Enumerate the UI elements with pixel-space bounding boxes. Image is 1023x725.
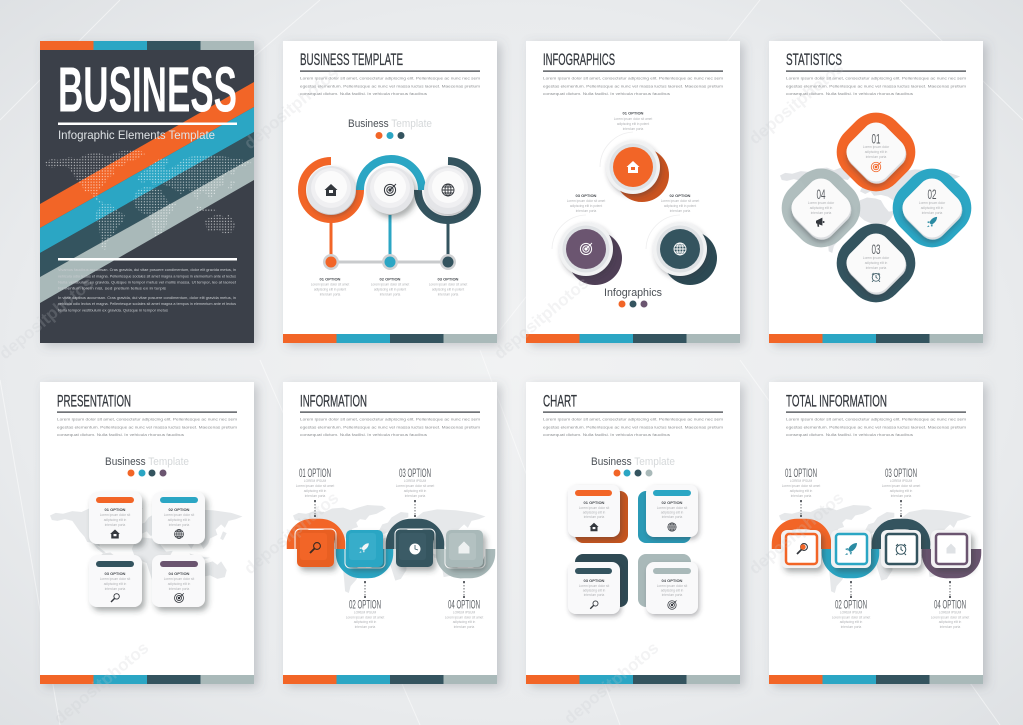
panel: presentation bbox=[40, 382, 254, 684]
card 01 bbox=[568, 485, 628, 543]
connector 04 bbox=[463, 581, 465, 598]
card 01 bbox=[89, 492, 142, 544]
diamond 02: interdum porta bbox=[922, 211, 942, 215]
diamond 04: 04 bbox=[816, 187, 826, 202]
card 02: Lorem ipsum dolor sit bbox=[657, 506, 687, 510]
card 04: Lorem ipsum dolor sit bbox=[164, 577, 194, 581]
diamond 03: Lorem ipsum dolor bbox=[863, 256, 890, 260]
ribbon highlight outlines bbox=[295, 529, 485, 568]
footer bar bbox=[769, 675, 983, 684]
label 02: adipiscing elit in bbox=[354, 620, 376, 624]
label 04: Lorem ipsum dolor sit amet bbox=[931, 616, 969, 620]
label 03: Lorem ipsum dolor sit amet bbox=[429, 282, 467, 286]
node 3 dark bbox=[418, 161, 477, 270]
diamond 01: Lorem ipsum dolor bbox=[863, 145, 890, 149]
heading rule bbox=[543, 70, 723, 72]
body text bbox=[786, 76, 967, 96]
body text: egestas elementum. Pellentesque ac nunc vel massa luctus laoreet. Maecenas pretium bbox=[786, 84, 967, 88]
card 02: Lorem ipsum dolor sit bbox=[164, 513, 194, 517]
legend dots bbox=[128, 470, 166, 476]
label 01: LOREM IPSUM bbox=[790, 479, 812, 483]
label 02: interdum porta bbox=[355, 625, 375, 629]
card 03: Lorem ipsum dolor sit bbox=[100, 577, 130, 581]
footer bar bbox=[283, 334, 497, 343]
connector 03 bbox=[414, 500, 416, 517]
card 03: interdum porta bbox=[584, 593, 604, 597]
stock watermarks: depositphotos bbox=[240, 63, 342, 153]
cover body text: Vivamus faucibus accumsan. Cras gravida, dui vitae posuere condimentum, dolor elit gravida metus, in bbox=[58, 268, 236, 272]
footer bar bbox=[526, 675, 740, 684]
body text: Lorem ipsum dolor sit amet, consectetur adipiscing elit. Pellentesque ac nunc nec sem bbox=[786, 416, 967, 422]
label 03: adipiscing elit in potent bbox=[432, 288, 464, 292]
label 01 bbox=[311, 276, 349, 296]
legend dots bbox=[614, 470, 652, 476]
heading: BUSINESS TEMPLATE bbox=[300, 50, 403, 69]
footer bar bbox=[283, 675, 497, 684]
body text bbox=[543, 76, 724, 96]
label 01: adipiscing elit in potent bbox=[617, 122, 649, 126]
heading rule bbox=[300, 70, 480, 72]
label 02: adipiscing elit in potent bbox=[374, 288, 406, 292]
label 02: 02 OPTION bbox=[380, 276, 401, 282]
card 02 bbox=[152, 492, 205, 544]
body text: consequat dictum. Nulla facilisi. In vehicula rhoncus faucibus bbox=[786, 91, 913, 96]
card 02 bbox=[638, 485, 698, 543]
heading: CHART bbox=[543, 392, 577, 410]
body text: consequat dictum. Nulla facilisi. In vehicula rhoncus faucibus bbox=[543, 432, 670, 437]
world map bbox=[293, 505, 486, 593]
card 01: 01 OPTION bbox=[584, 500, 605, 505]
label 03: LOREM IPSUM bbox=[404, 479, 426, 483]
teal disc with globe icon bbox=[646, 215, 717, 285]
cover title: BUSINESS bbox=[58, 54, 237, 126]
label 04: Lorem ipsum dolor sit amet bbox=[445, 616, 483, 620]
label 03: interdum porta bbox=[576, 209, 596, 213]
label 02: LOREM IPSUM bbox=[840, 610, 862, 614]
connector 03 bbox=[900, 500, 902, 517]
card 01: Lorem ipsum dolor sit bbox=[579, 506, 609, 510]
node 1 orange bbox=[302, 161, 360, 270]
legend dots bbox=[376, 132, 404, 139]
panel: total information bbox=[769, 382, 983, 684]
stock watermarks bbox=[0, 58, 847, 725]
card 03: 03 OPTION bbox=[584, 578, 605, 583]
body text: egestas elementum. Pellentesque ac nunc vel massa luctus laoreet. Maecenas pretium bbox=[300, 84, 481, 88]
card 01: interdum porta bbox=[105, 523, 125, 527]
body text: consequat dictum. Nulla facilisi. In vehicula rhoncus faucibus bbox=[543, 91, 670, 96]
card 03 bbox=[568, 554, 628, 614]
label 02 bbox=[661, 193, 699, 213]
label 03 bbox=[882, 468, 920, 498]
cover body text: vehicula odio lectus et magna. Pellentesque sodales sit amet magna a tempus in elementum ante et lectus bbox=[58, 302, 236, 306]
card 01: Lorem ipsum dolor sit bbox=[100, 513, 130, 517]
label 04: adipiscing elit in bbox=[939, 620, 961, 624]
body text: egestas elementum. Pellentesque ac nunc vel massa luctus laoreet. Maecenas pretium bbox=[543, 424, 724, 430]
heading rule bbox=[300, 412, 480, 413]
cover body text: Nulla vestibulum ex gravida. Quisque in tempor metus vel mollis massa. Ut tempor, leo at laoreet bbox=[58, 280, 236, 284]
body text bbox=[300, 416, 481, 437]
label 03 bbox=[429, 276, 467, 296]
stock watermarks: depositphotos bbox=[745, 488, 847, 578]
panel: statistics bbox=[769, 41, 983, 343]
label 02: interdum porta bbox=[670, 209, 690, 213]
label 02: adipiscing elit in potent bbox=[664, 204, 696, 208]
label 01: interdum porta bbox=[791, 494, 811, 498]
diamond 02: Lorem ipsum dolor bbox=[919, 201, 946, 205]
world map bbox=[780, 165, 960, 253]
label 01 bbox=[614, 110, 652, 131]
connector 01 bbox=[800, 500, 802, 517]
card 04: 04 OPTION bbox=[169, 571, 190, 576]
diamond 04: adipiscing elit in bbox=[810, 206, 832, 210]
legend dots bbox=[618, 300, 648, 308]
diamond 01 bbox=[825, 101, 927, 203]
label 02: Lorem ipsum dolor sit amet bbox=[661, 199, 699, 203]
label 03: 03 OPTION bbox=[885, 468, 917, 480]
card 04: adipiscing elit in bbox=[661, 588, 683, 592]
label 04: LOREM IPSUM bbox=[939, 610, 961, 614]
label 02 bbox=[346, 600, 384, 629]
label 01: 01 OPTION bbox=[320, 276, 341, 282]
body text: egestas elementum. Pellentesque ac nunc vel massa luctus laoreet. Maecenas pretium bbox=[57, 424, 238, 430]
diamond 01: 01 bbox=[872, 132, 880, 146]
label 01: interdum porta bbox=[305, 494, 325, 498]
card 03: Lorem ipsum dolor sit bbox=[579, 584, 609, 588]
label 01: Lorem ipsum dolor sit amet bbox=[782, 484, 820, 488]
label 01: adipiscing elit in bbox=[790, 489, 812, 493]
ribbon bbox=[292, 524, 490, 573]
panel: information bbox=[283, 382, 497, 684]
square 4 with document bbox=[446, 530, 483, 567]
label 02 bbox=[832, 600, 870, 629]
stock watermarks: depositphotos bbox=[240, 488, 342, 578]
square 2 with rocket bbox=[346, 530, 383, 567]
heading: TOTAL INFORMATION bbox=[786, 392, 887, 410]
diamond 02: adipiscing elit in bbox=[921, 206, 943, 210]
label 01: Lorem ipsum dolor sit amet bbox=[614, 117, 652, 121]
heading: PRESENTATION bbox=[57, 392, 131, 410]
label 04: LOREM IPSUM bbox=[453, 610, 475, 614]
orange disc with home icon bbox=[600, 132, 669, 202]
connector 02 bbox=[364, 581, 366, 598]
purple disc with target icon bbox=[552, 215, 622, 285]
diamond 01: adipiscing elit in bbox=[865, 150, 887, 154]
card 04: adipiscing elit in bbox=[168, 582, 190, 586]
square 1 with magnifier bbox=[781, 530, 821, 568]
card 04: Lorem ipsum dolor sit bbox=[657, 584, 687, 588]
connector 01 bbox=[314, 500, 316, 517]
label 02: interdum porta bbox=[841, 625, 861, 629]
chart heading: Business Template bbox=[591, 456, 675, 468]
dotted world map bbox=[45, 150, 252, 250]
disc with globe icon bbox=[424, 166, 472, 214]
connector line bbox=[331, 260, 448, 264]
heading: INFOGRAPHICS bbox=[543, 50, 615, 69]
square 2 with rocket bbox=[831, 530, 871, 568]
label 01: Lorem ipsum dolor sit amet bbox=[311, 282, 349, 286]
label 04: 04 OPTION bbox=[448, 600, 480, 612]
panel: chart bbox=[526, 382, 740, 684]
card 04: interdum porta bbox=[169, 587, 189, 591]
card 01: adipiscing elit in bbox=[104, 518, 126, 522]
label 02: Lorem ipsum dolor sit amet bbox=[832, 616, 870, 620]
chart heading: Business Template bbox=[348, 118, 432, 130]
ribbon bbox=[777, 524, 976, 573]
card 02: interdum porta bbox=[662, 515, 682, 519]
world map bbox=[50, 505, 243, 593]
body text bbox=[57, 416, 238, 437]
square 3 with clock bbox=[881, 530, 921, 568]
label 02: interdum porta bbox=[380, 292, 400, 296]
diamond 04: interdum porta bbox=[811, 211, 831, 215]
card 02: 02 OPTION bbox=[169, 507, 190, 512]
body text: consequat dictum. Nulla facilisi. In vehicula rhoncus faucibus bbox=[300, 91, 427, 96]
diamond 03: 03 bbox=[872, 242, 880, 257]
label 02: 02 OPTION bbox=[670, 193, 691, 198]
label 03 bbox=[396, 468, 434, 498]
panel: business template bbox=[283, 41, 497, 343]
label 04: interdum porta bbox=[940, 625, 960, 629]
label 03: Lorem ipsum dolor sit amet bbox=[882, 484, 920, 488]
square 1 with magnifier bbox=[297, 530, 334, 567]
square 4 with document bbox=[931, 530, 971, 568]
disc with target icon bbox=[366, 166, 414, 214]
diamond 04 bbox=[770, 157, 872, 259]
diamond 03: interdum porta bbox=[866, 266, 886, 270]
heading: STATISTICS bbox=[786, 50, 842, 69]
cover subtitle: Infographic Elements Template bbox=[58, 128, 215, 142]
card 03: adipiscing elit in bbox=[104, 582, 126, 586]
label 01: interdum porta bbox=[320, 292, 340, 296]
heading: INFORMATION bbox=[300, 392, 367, 410]
label 03: Lorem ipsum dolor sit amet bbox=[567, 199, 605, 203]
label 02 bbox=[371, 276, 409, 296]
footer bar bbox=[769, 334, 983, 343]
label 03: interdum porta bbox=[438, 292, 458, 296]
body text bbox=[543, 416, 724, 437]
label 02: 02 OPTION bbox=[835, 600, 867, 612]
label 03 bbox=[567, 193, 605, 213]
card 04 bbox=[152, 555, 205, 607]
label 01: 01 OPTION bbox=[623, 110, 644, 116]
card 02: interdum porta bbox=[169, 523, 189, 527]
card 04 bbox=[638, 554, 698, 614]
body text: egestas elementum. Pellentesque ac nunc vel massa luctus laoreet. Maecenas pretium bbox=[300, 424, 481, 430]
heading rule bbox=[543, 412, 723, 413]
card 04: interdum porta bbox=[662, 593, 682, 597]
label 01: 01 OPTION bbox=[299, 468, 331, 480]
label 01: LOREM IPSUM bbox=[304, 479, 326, 483]
card 01: 01 OPTION bbox=[105, 507, 126, 512]
body text: consequat dictum. Nulla facilisi. In vehicula rhoncus faucibus bbox=[57, 432, 184, 437]
card 03 bbox=[89, 555, 142, 607]
label 03: 03 OPTION bbox=[438, 276, 459, 282]
label 03: adipiscing elit in bbox=[890, 489, 912, 493]
label 03: interdum porta bbox=[891, 494, 911, 498]
body text: Lorem ipsum dolor sit amet, consectetur adipiscing elit. Pellentesque ac nunc nec sem bbox=[786, 76, 967, 80]
card 03: 03 OPTION bbox=[105, 571, 126, 576]
label 04: interdum porta bbox=[454, 625, 474, 629]
heading rule bbox=[786, 70, 966, 72]
label 02: LOREM IPSUM bbox=[354, 610, 376, 614]
label 03: interdum porta bbox=[405, 494, 425, 498]
card 01: interdum porta bbox=[584, 515, 604, 519]
body text: Lorem ipsum dolor sit amet, consectetur adipiscing elit. Pellentesque ac nunc nec sem bbox=[543, 76, 724, 80]
label 02: Lorem ipsum dolor sit amet bbox=[346, 616, 384, 620]
label 03: adipiscing elit in bbox=[404, 489, 426, 493]
label 04: 04 OPTION bbox=[934, 600, 966, 612]
body text: Lorem ipsum dolor sit amet, consectetur adipiscing elit. Pellentesque ac nunc nec sem bbox=[57, 416, 238, 422]
cover body text: In vitae dapibus accumsan. Cras gravida, dui vitae posuere condimentum, dolor elit gravida metus, in bbox=[58, 296, 236, 300]
chart heading: Business Template bbox=[105, 456, 189, 468]
card 02: 02 OPTION bbox=[662, 500, 683, 505]
body text: egestas elementum. Pellentesque ac nunc vel massa luctus laoreet. Maecenas pretium bbox=[543, 84, 724, 88]
label 02: adipiscing elit in bbox=[840, 620, 862, 624]
cover body text: Nulla tempor vestibulum ex gravida. Quisque in tempor metus bbox=[58, 308, 168, 312]
disc with home icon bbox=[307, 166, 355, 214]
card 02: adipiscing elit in bbox=[168, 518, 190, 522]
body text: Lorem ipsum dolor sit amet, consectetur adipiscing elit. Pellentesque ac nunc nec sem bbox=[300, 416, 481, 422]
connector 04 bbox=[949, 581, 951, 598]
body text: consequat dictum. Nulla facilisi. In vehicula rhoncus faucibus bbox=[300, 432, 427, 437]
cover body text bbox=[58, 268, 236, 312]
cover top colour bar bbox=[40, 41, 254, 50]
diamond 01: interdum porta bbox=[866, 155, 886, 159]
label 03: Lorem ipsum dolor sit amet bbox=[396, 484, 434, 488]
diagonal stripes bbox=[40, 82, 254, 303]
label 02: 02 OPTION bbox=[349, 600, 381, 612]
square 3 with clock bbox=[396, 530, 433, 567]
diamond 04: Lorem ipsum dolor bbox=[808, 201, 835, 205]
panel: infographics bbox=[526, 41, 740, 343]
heading rule bbox=[57, 412, 237, 413]
label 03: LOREM IPSUM bbox=[890, 479, 912, 483]
label 01 bbox=[782, 468, 820, 498]
label 01: adipiscing elit in potent bbox=[314, 288, 346, 292]
chart caption: Infographics bbox=[604, 287, 662, 299]
footer bar bbox=[40, 675, 254, 684]
label 04: adipiscing elit in bbox=[453, 620, 475, 624]
diamond 03 bbox=[825, 212, 927, 314]
label 03: 03 OPTION bbox=[399, 468, 431, 480]
heading rule bbox=[786, 412, 966, 413]
world map bbox=[779, 505, 972, 593]
body text: Lorem ipsum dolor sit amet, consectetur adipiscing elit. Pellentesque ac nunc nec sem bbox=[300, 76, 481, 80]
label 04 bbox=[931, 600, 969, 629]
stock watermarks: depositphotos bbox=[745, 58, 847, 148]
cover rule bbox=[58, 122, 237, 125]
label 03: adipiscing elit in potent bbox=[570, 204, 602, 208]
label 03: 03 OPTION bbox=[576, 193, 597, 198]
body text: Lorem ipsum dolor sit amet, consectetur adipiscing elit. Pellentesque ac nunc nec sem bbox=[543, 416, 724, 422]
diamond 02: 02 bbox=[928, 187, 936, 202]
label 01: 01 OPTION bbox=[785, 468, 817, 480]
cover lower rule bbox=[58, 258, 237, 260]
card 03: interdum porta bbox=[105, 587, 125, 591]
card 02: adipiscing elit in bbox=[661, 510, 683, 514]
body text: egestas elementum. Pellentesque ac nunc vel massa luctus laoreet. Maecenas pretium bbox=[786, 424, 967, 430]
label 02: Lorem ipsum dolor sit amet bbox=[371, 282, 409, 286]
panel: cover page bbox=[40, 41, 254, 343]
card 04: 04 OPTION bbox=[662, 578, 683, 583]
label 01 bbox=[296, 468, 334, 498]
diamond 03: adipiscing elit in bbox=[865, 261, 887, 265]
label 01: interdum porta bbox=[623, 127, 643, 131]
card 01: adipiscing elit in bbox=[583, 510, 605, 514]
cover body text: vehicula odio lectus et magna. Pellentesque sodales sit amet magna a tempus in elementum ante et lectus bbox=[58, 274, 236, 278]
label 04 bbox=[445, 600, 483, 629]
connector 02 bbox=[850, 581, 852, 598]
label 01: adipiscing elit in bbox=[304, 489, 326, 493]
cover body text: fermentum lorem nisi, sed pretium tellus ex in turpis bbox=[58, 286, 166, 290]
label 01: Lorem ipsum dolor sit amet bbox=[296, 484, 334, 488]
footer bar bbox=[526, 334, 740, 343]
diamond 02 bbox=[881, 157, 983, 259]
stock watermarks: depositphotos bbox=[490, 273, 592, 363]
node 2 teal bbox=[360, 159, 422, 270]
body text bbox=[300, 76, 481, 96]
body text bbox=[786, 416, 967, 437]
body text: consequat dictum. Nulla facilisi. In vehicula rhoncus faucibus bbox=[786, 432, 913, 437]
card 03: adipiscing elit in bbox=[583, 588, 605, 592]
